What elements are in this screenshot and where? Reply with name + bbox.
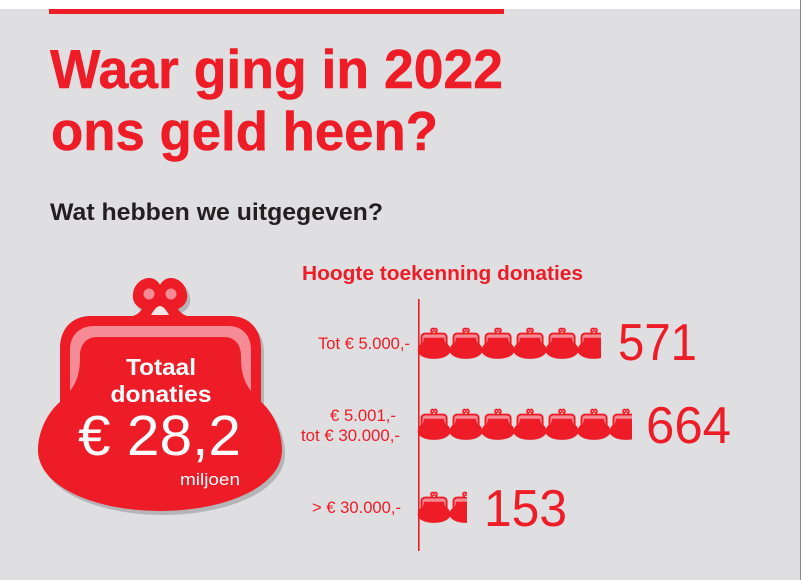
total label: Totaal bbox=[126, 354, 196, 380]
title bbox=[50, 38, 503, 162]
purse icon bbox=[38, 278, 282, 511]
row 1 purses bbox=[418, 328, 610, 359]
row 3 purses bbox=[418, 492, 467, 523]
big purse: total donations bbox=[38, 278, 285, 515]
title: ons geld heen? bbox=[51, 100, 438, 162]
purse shadow bbox=[41, 282, 285, 515]
row 2 value: 664 bbox=[646, 397, 731, 455]
chart axis bbox=[418, 299, 420, 551]
row 2 purses bbox=[418, 409, 642, 440]
total amount: € 28,2 bbox=[78, 404, 241, 468]
row 1 value: 571 bbox=[618, 314, 697, 372]
row 2 label: € 5.001,- bbox=[330, 407, 396, 425]
row 2 label: tot € 30.000,- bbox=[301, 427, 400, 445]
subtitle: Wat hebben we uitgegeven? bbox=[50, 199, 383, 226]
total label: donaties bbox=[110, 381, 212, 407]
total label bbox=[110, 354, 212, 407]
top red rule bbox=[49, 9, 504, 14]
unit: miljoen bbox=[180, 470, 240, 489]
row 2 label bbox=[301, 407, 400, 445]
title: Waar ging in 2022 bbox=[50, 38, 503, 100]
pictogram chart bbox=[301, 299, 731, 551]
row 3 value: 153 bbox=[484, 480, 567, 538]
chart heading: Hoogte toekenning donaties bbox=[302, 262, 583, 285]
row 3 label: > € 30.000,- bbox=[312, 499, 401, 517]
row 1 label: Tot € 5.000,- bbox=[318, 335, 410, 353]
